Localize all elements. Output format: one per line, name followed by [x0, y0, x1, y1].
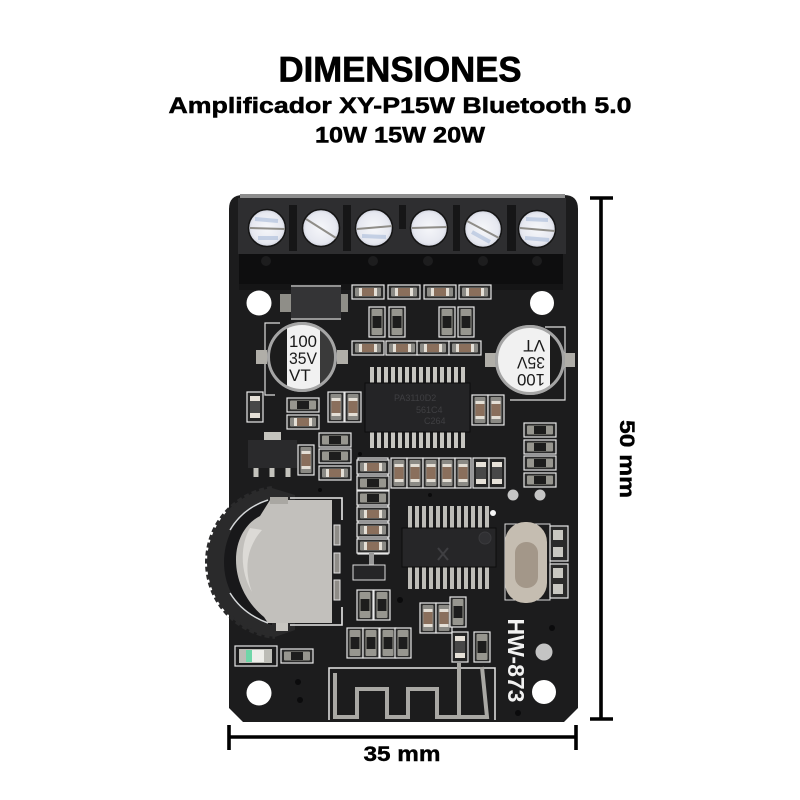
dimension label: 35 mm: 35 mm — [364, 743, 440, 766]
capacitor label right: 100 — [517, 370, 545, 389]
title: DIMENSIONES — [278, 50, 522, 90]
status LEDs — [235, 632, 490, 666]
volume knob — [207, 488, 295, 637]
screw terminal block — [238, 194, 566, 290]
amplifier chip with pins: 561C4 — [416, 405, 443, 415]
lower passive components — [347, 590, 468, 662]
left passive components — [247, 392, 504, 480]
diode — [280, 286, 348, 319]
amplifier chip with pins: C264 — [424, 416, 446, 426]
dimension arrow: height — [590, 198, 613, 719]
capacitor: left 100 35V VT: 35V — [289, 349, 318, 368]
subtitle: power options: 10W 15W 20W — [315, 122, 485, 148]
PCB antenna — [329, 663, 495, 720]
potentiometer metal housing — [236, 497, 342, 631]
capacitor: left 100 35V VT — [256, 322, 348, 395]
chip marking: PA3110D2 — [394, 393, 436, 403]
board substrate — [229, 195, 578, 722]
small transistor — [353, 553, 385, 580]
board model label: HW-873 — [503, 618, 529, 702]
dimension label: 50 mm: 50 mm — [615, 420, 638, 498]
subtitle: product name: Amplificador XY-P15W Bluetooth 5.0 — [168, 93, 632, 118]
capacitor: left 100 35V VT: VT — [289, 366, 311, 385]
voltage regulator — [248, 432, 297, 477]
crystal oscillator — [505, 522, 550, 603]
circuit board photo — [207, 194, 578, 722]
capacitor: right 100 35V VT — [485, 325, 575, 400]
dimension arrow: width — [229, 725, 576, 750]
power section components — [352, 285, 491, 355]
crystal capacitors — [550, 526, 568, 598]
bluetooth chip with pins — [402, 506, 496, 589]
middle resistor rows — [357, 458, 505, 554]
capacitor label left: 100 — [289, 332, 317, 351]
right passive column — [524, 423, 556, 487]
capacitor label right — [516, 336, 545, 389]
capacitor label right: 35V — [516, 353, 545, 372]
mounting holes — [246, 290, 556, 706]
vias — [295, 452, 555, 716]
amplifier chip with pins — [365, 367, 470, 448]
test pads — [490, 490, 552, 660]
capacitor label right: VT — [523, 336, 545, 355]
